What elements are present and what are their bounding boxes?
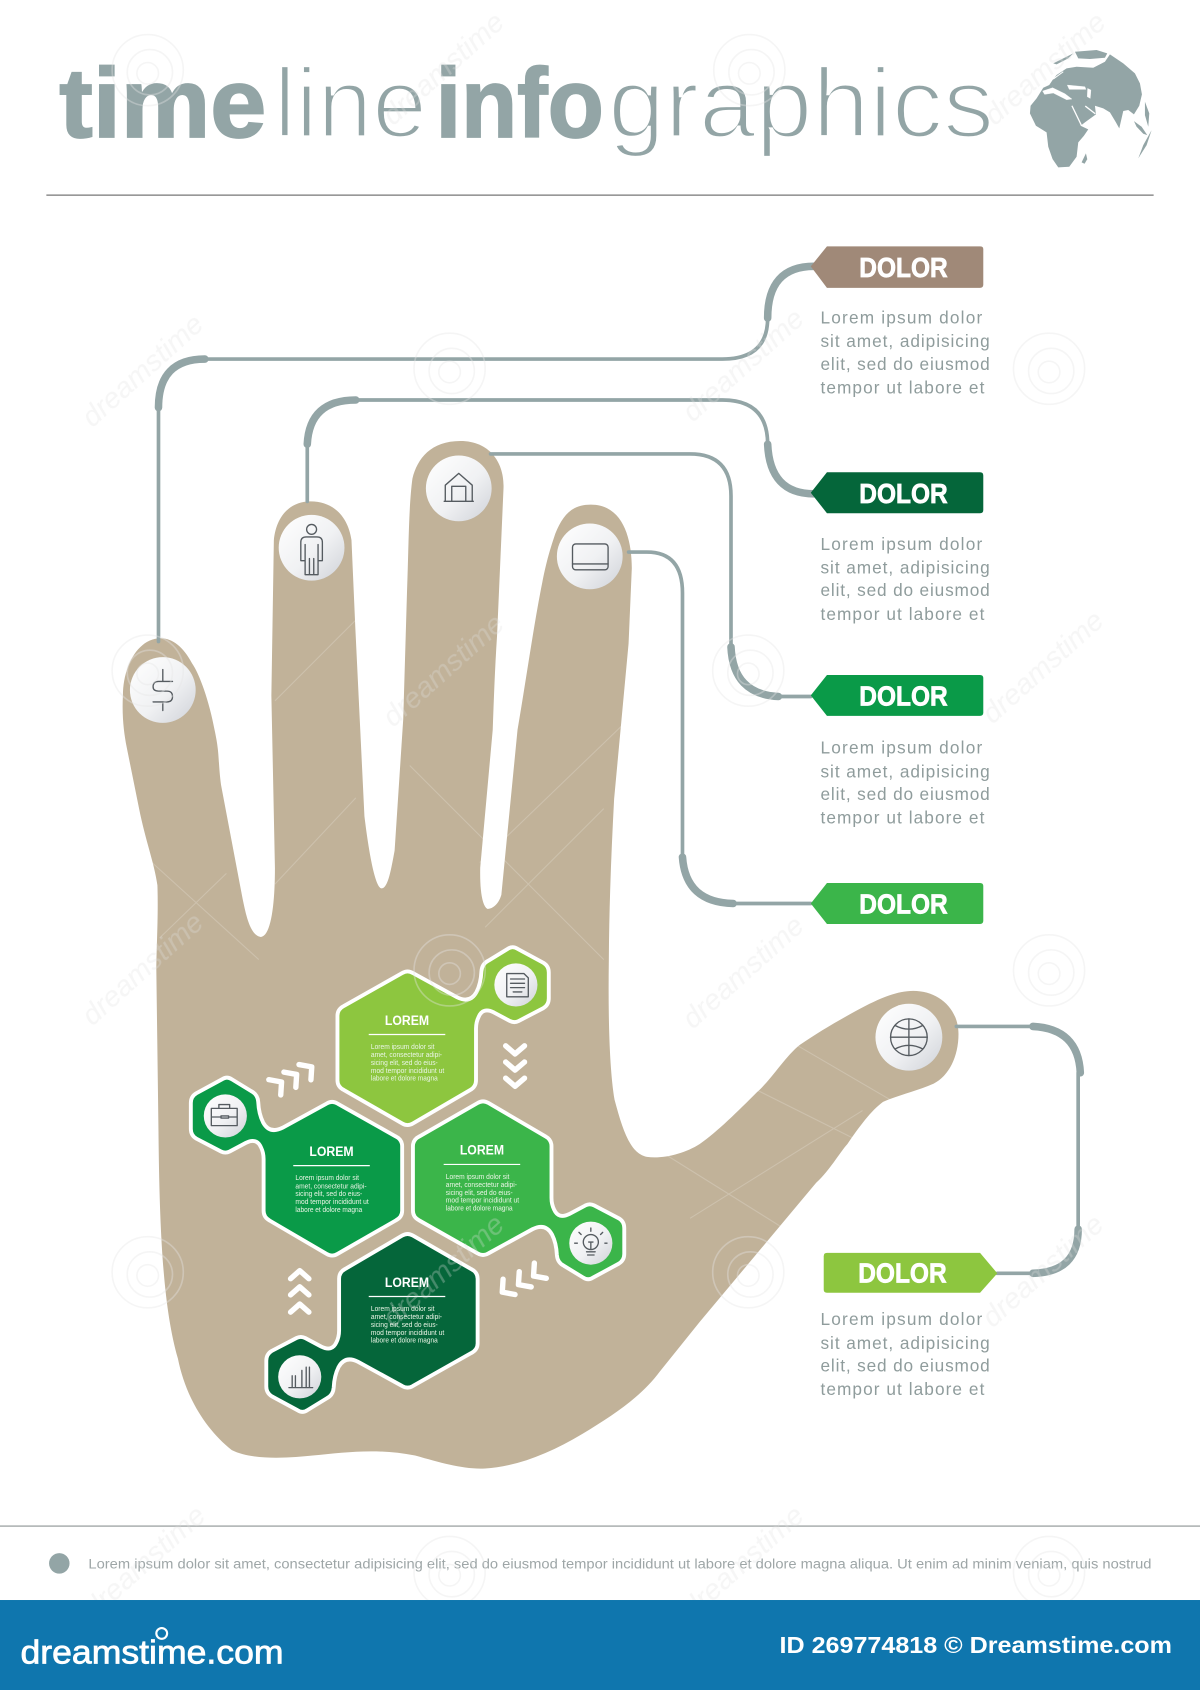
title <box>59 48 994 158</box>
text block 3: elit, sed do eiusmod <box>820 784 990 804</box>
hexagon text: left: Lorem ipsum dolor sit <box>295 1173 359 1182</box>
infographic canvas: dreamstime <box>978 6 1112 132</box>
hexagon text: bottom: sicing elit, sed do eius- <box>371 1320 438 1329</box>
divider <box>46 194 1154 196</box>
icon: light bulb <box>569 1222 612 1265</box>
hexagon: mid green, right <box>413 1101 624 1279</box>
infographic canvas: dreamstime <box>976 604 1110 730</box>
text block 5 <box>820 1309 990 1399</box>
connector: thumb to lime tag <box>956 1026 1080 1273</box>
text block 3 <box>820 738 990 828</box>
tag: green <box>811 675 983 716</box>
hexagon text: bottom: amet, consectetur adipi- <box>371 1312 443 1321</box>
tag: green: DOLOR <box>859 681 948 712</box>
tag: brown <box>811 246 983 288</box>
footer band <box>0 1600 1200 1690</box>
connector: card finger to mid green tag <box>629 552 811 904</box>
title: time <box>59 48 266 158</box>
text block 5: Lorem ipsum dolor <box>820 1309 982 1329</box>
arrows: down chevrons <box>506 1046 525 1086</box>
arrows: down-left chevrons <box>496 1263 546 1300</box>
image id credit: ID 269774818 © Dreamstime.com <box>780 1632 1172 1658</box>
hexagon text: bottom: Lorem ipsum dolor sit <box>371 1304 435 1313</box>
text block 1 <box>820 307 990 398</box>
infographic canvas: dreamstime <box>376 1208 511 1334</box>
text block 2: tempor ut labore et <box>820 604 985 624</box>
text block 2: elit, sed do eiusmod <box>820 580 990 600</box>
text block 2: Lorem ipsum dolor <box>820 534 982 554</box>
hexagon text: right: LOREM <box>460 1143 504 1158</box>
hexagon text: top: mod tempor incididunt ut <box>371 1066 444 1075</box>
hexagon text: top: LOREM <box>385 1013 429 1028</box>
text block 1: Lorem ipsum dolor <box>820 307 982 327</box>
title: line <box>274 48 427 158</box>
connector: dollar finger to brown tag <box>158 266 814 642</box>
hexagon text: top: sicing elit, sed do eius- <box>371 1058 438 1067</box>
hexagon text: bottom <box>369 1275 445 1345</box>
infographic canvas: dreamstime <box>76 308 210 433</box>
hexagon text: top: Lorem ipsum dolor sit <box>371 1042 435 1051</box>
icon: house on middle finger <box>426 456 492 521</box>
tag: lime: DOLOR <box>858 1257 947 1288</box>
icon: card on index finger <box>557 523 623 589</box>
hexagon text: top: labore et dolore magna <box>371 1074 439 1083</box>
hexagon: dark green, bottom <box>266 1234 478 1412</box>
text block 5: tempor ut labore et <box>820 1379 985 1399</box>
hexagon text: bottom: LOREM <box>385 1275 429 1290</box>
hexagon: green, left <box>191 1078 402 1256</box>
infographic canvas: dreamstime <box>676 303 811 428</box>
text block 5: sit amet, adipisicing <box>820 1333 990 1353</box>
hexagon text: left <box>293 1144 370 1214</box>
text block 3: sit amet, adipisicing <box>820 761 990 781</box>
icon: bar chart <box>278 1355 321 1398</box>
text block 5: elit, sed do eiusmod <box>820 1355 990 1375</box>
infographic canvas: dreamstime <box>976 1208 1110 1334</box>
hexagon text: top: amet, consectetur adipi- <box>371 1050 443 1059</box>
infographic canvas: dreamstime <box>376 608 511 733</box>
text block 1: sit amet, adipisicing <box>820 331 990 351</box>
hexagon text: right: labore et dolore magna <box>446 1204 514 1213</box>
tag: mid green <box>811 883 983 924</box>
text block 2: sit amet, adipisicing <box>820 558 990 578</box>
text block 2 <box>820 534 990 624</box>
hexagon: lime, top <box>337 947 549 1125</box>
hexagon text: top <box>369 1013 445 1083</box>
brand logo: dreamstime.com <box>20 1635 284 1672</box>
arrows: up-right chevrons <box>269 1059 318 1095</box>
connector: person finger to dark green tag <box>307 400 814 501</box>
text block 3: Lorem ipsum dolor <box>820 738 982 758</box>
icon: briefcase <box>204 1094 247 1137</box>
title: graphics <box>608 48 994 158</box>
hexagon text: bottom: mod tempor incididunt ut <box>371 1328 444 1337</box>
footer bullet <box>49 1553 70 1574</box>
hexagon text: right: amet, consectetur adipi- <box>446 1180 518 1189</box>
tag: mid green: DOLOR <box>859 889 948 920</box>
text block 1: tempor ut labore et <box>820 378 985 398</box>
hexagon text: right: mod tempor incididunt ut <box>446 1196 519 1205</box>
icon: person on ring finger <box>279 515 344 581</box>
hexagon text: right: sicing elit, sed do eius- <box>446 1188 513 1197</box>
hexagon text: left: mod tempor incididunt ut <box>295 1197 369 1206</box>
text block 3: tempor ut labore et <box>820 808 985 828</box>
tag: dark green <box>811 472 983 513</box>
icon: basketball on thumb <box>875 1004 942 1071</box>
text block 1: elit, sed do eiusmod <box>820 354 990 374</box>
icon: document <box>494 963 537 1006</box>
hexagon text: left: LOREM <box>309 1144 354 1159</box>
infographic canvas: dreamstime <box>676 910 811 1035</box>
tag: brown: DOLOR <box>859 252 948 283</box>
connector: house finger to green tag <box>491 454 811 697</box>
hexagon text: left: labore et dolore magna <box>295 1205 363 1214</box>
hexagon text: right <box>444 1143 520 1213</box>
infographic canvas: dreamstime <box>76 906 210 1032</box>
icon: globe <box>1030 50 1152 167</box>
tag: dark green: DOLOR <box>859 478 948 509</box>
infographic canvas: dreamstime <box>676 1499 811 1625</box>
hand silhouette <box>123 441 958 1469</box>
icon: dollar on little finger <box>130 657 196 723</box>
hexagon text: right: Lorem ipsum dolor sit <box>446 1172 509 1181</box>
infographic canvas: dreamstime <box>78 1499 212 1625</box>
hexagon text: left: amet, consectetur adipi- <box>295 1181 367 1190</box>
arrows: up chevrons <box>291 1271 309 1312</box>
footer text: Lorem ipsum dolor sit amet, consectetur adipisicing elit, sed do eiusmod tempor incididunt ut labore et dolore magna aliqua. Ut enim ad minim veniam, quis nostrud <box>88 1557 1151 1572</box>
hexagon text: left: sicing elit, sed do eius- <box>295 1189 363 1198</box>
hexagon text: bottom: labore et dolore magna <box>371 1336 439 1345</box>
infographic canvas: dreamstime <box>376 6 511 132</box>
tag: lime <box>824 1253 997 1293</box>
title: info <box>436 48 604 158</box>
